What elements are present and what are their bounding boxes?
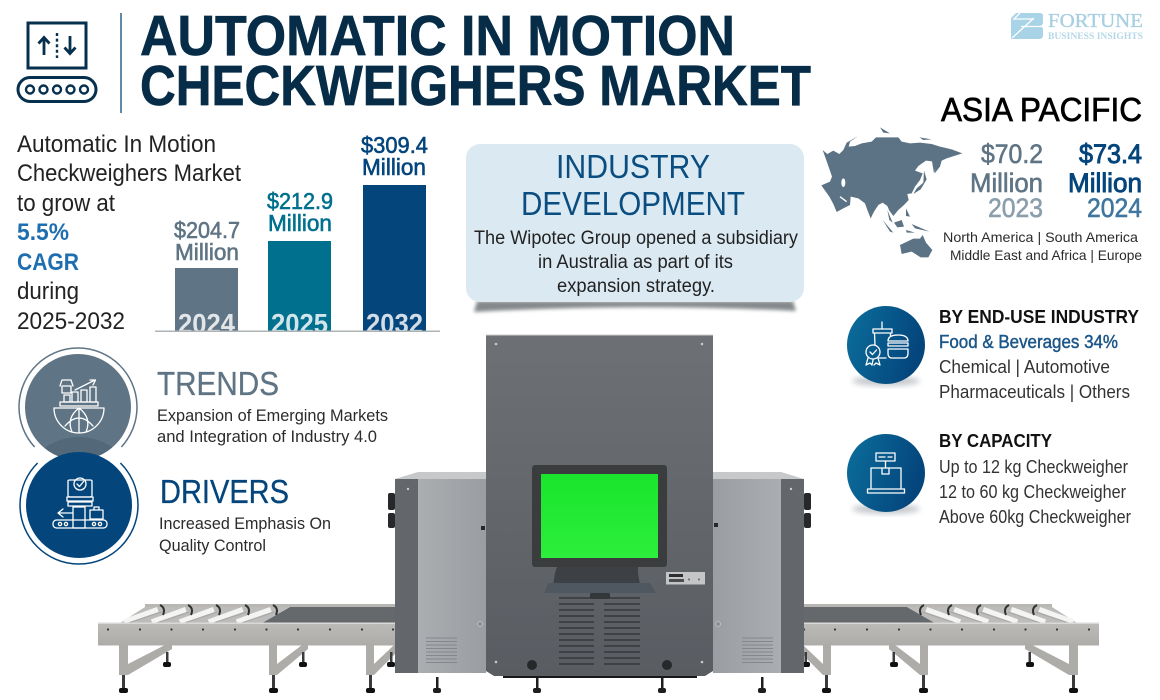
checkweigher machine (388, 335, 811, 693)
icon: weighing scale (868, 453, 904, 493)
panel: industry development: in Australia as part of its (538, 252, 733, 273)
bar chart: $204.7 (174, 217, 240, 243)
panel: trends: and Integration of Industry 4.0 (157, 427, 377, 446)
panel: industry development: INDUSTRY (556, 148, 710, 185)
side unit: right (713, 472, 811, 673)
conveyor: right (794, 604, 1099, 693)
panel: by end-use industry (847, 306, 1139, 402)
bar chart: Million (175, 239, 239, 265)
logo: Fortune Business Insights: FORTUNE (1048, 10, 1143, 32)
panel: by end-use industry: Chemical | Automotive (939, 357, 1110, 377)
asia pacific region: $73.4 (1079, 139, 1142, 169)
asia pacific region: Million (1068, 168, 1142, 198)
asia pacific region: 2023 (988, 193, 1043, 223)
market growth text: 5.5% (17, 219, 69, 246)
asia pacific region: ASIA PACIFIC (941, 91, 1142, 128)
panel: trends: Expansion of Emerging Markets (157, 406, 388, 425)
icon: quality control conveyor (53, 478, 107, 528)
bar chart: 2032 (366, 308, 423, 339)
icon: food and beverages (866, 322, 908, 365)
panel: industry development: expansion strategy. (557, 276, 715, 297)
market growth text (17, 131, 241, 335)
icon: market growth globe (54, 380, 104, 433)
asia pacific region: Middle East and Africa | Europe (950, 247, 1142, 263)
main panel (486, 335, 713, 676)
panel: by end-use industry: BY END-USE INDUSTRY (939, 307, 1139, 327)
asia pacific region: 2024 (1087, 193, 1142, 223)
asia pacific region: North America | South America (943, 229, 1138, 245)
green screen (541, 474, 658, 558)
bar chart: 2025 (271, 308, 328, 339)
icon: checkweigher conveyor (18, 23, 96, 102)
panel: by capacity: BY CAPACITY (939, 431, 1052, 451)
monitor (532, 465, 667, 567)
logo: Fortune Business Insights: BUSINESS INSIGHTS (1048, 31, 1143, 41)
panel: drivers (20, 452, 331, 564)
asia pacific region: $70.2 (981, 139, 1043, 169)
panel: by capacity: Above 60kg Checkweigher (939, 507, 1131, 527)
asia pacific region (821, 91, 1142, 263)
monitor stand (553, 567, 640, 585)
panel: industry development: DEVELOPMENT (521, 185, 745, 222)
map: asia pacific (821, 127, 962, 257)
side unit: left (388, 472, 486, 673)
market growth text: 2025-2032 (17, 308, 125, 335)
market growth text: to grow at (17, 190, 115, 217)
panel: trends (18, 347, 388, 456)
panel: industry development (466, 144, 804, 312)
logo: Fortune Business Insights (1011, 10, 1143, 41)
panel: by capacity (847, 431, 1131, 527)
bar chart: Million (268, 210, 332, 236)
panel: by end-use industry: Food & Beverages 34% (939, 332, 1118, 352)
conveyor: left (98, 604, 403, 693)
vents (559, 598, 640, 664)
bar chart: 2024 (178, 308, 235, 339)
panel: drivers: Quality Control (159, 536, 266, 555)
label plate (666, 572, 705, 584)
panel: trends: TRENDS (157, 365, 279, 402)
feet (433, 677, 766, 693)
title: AUTOMATIC IN MOTION (140, 4, 735, 68)
bar chart: Million (362, 154, 426, 180)
bar chart: $212.9 (267, 188, 333, 214)
bar chart (155, 132, 440, 339)
panel: industry development: The Wipotec Group opened a subsidiary (474, 228, 798, 249)
panel: by capacity: Up to 12 kg Checkweigher (939, 457, 1128, 477)
panel: drivers: DRIVERS (160, 473, 289, 510)
legs (119, 645, 400, 675)
title (140, 4, 811, 118)
title: CHECKWEIGHERS MARKET (140, 54, 811, 118)
panel: drivers: Increased Emphasis On (159, 514, 331, 533)
market growth text: during (17, 278, 79, 305)
panel: by end-use industry: Pharmaceuticals | Others (939, 382, 1130, 402)
market growth text: Checkweighers Market (17, 160, 241, 187)
bar chart: $309.4 (361, 132, 428, 158)
market growth text: CAGR (17, 249, 79, 276)
panel: by capacity: 12 to 60 kg Checkweigher (939, 482, 1126, 502)
asia pacific region: Million (970, 168, 1043, 198)
market growth text: Automatic In Motion (17, 131, 216, 158)
